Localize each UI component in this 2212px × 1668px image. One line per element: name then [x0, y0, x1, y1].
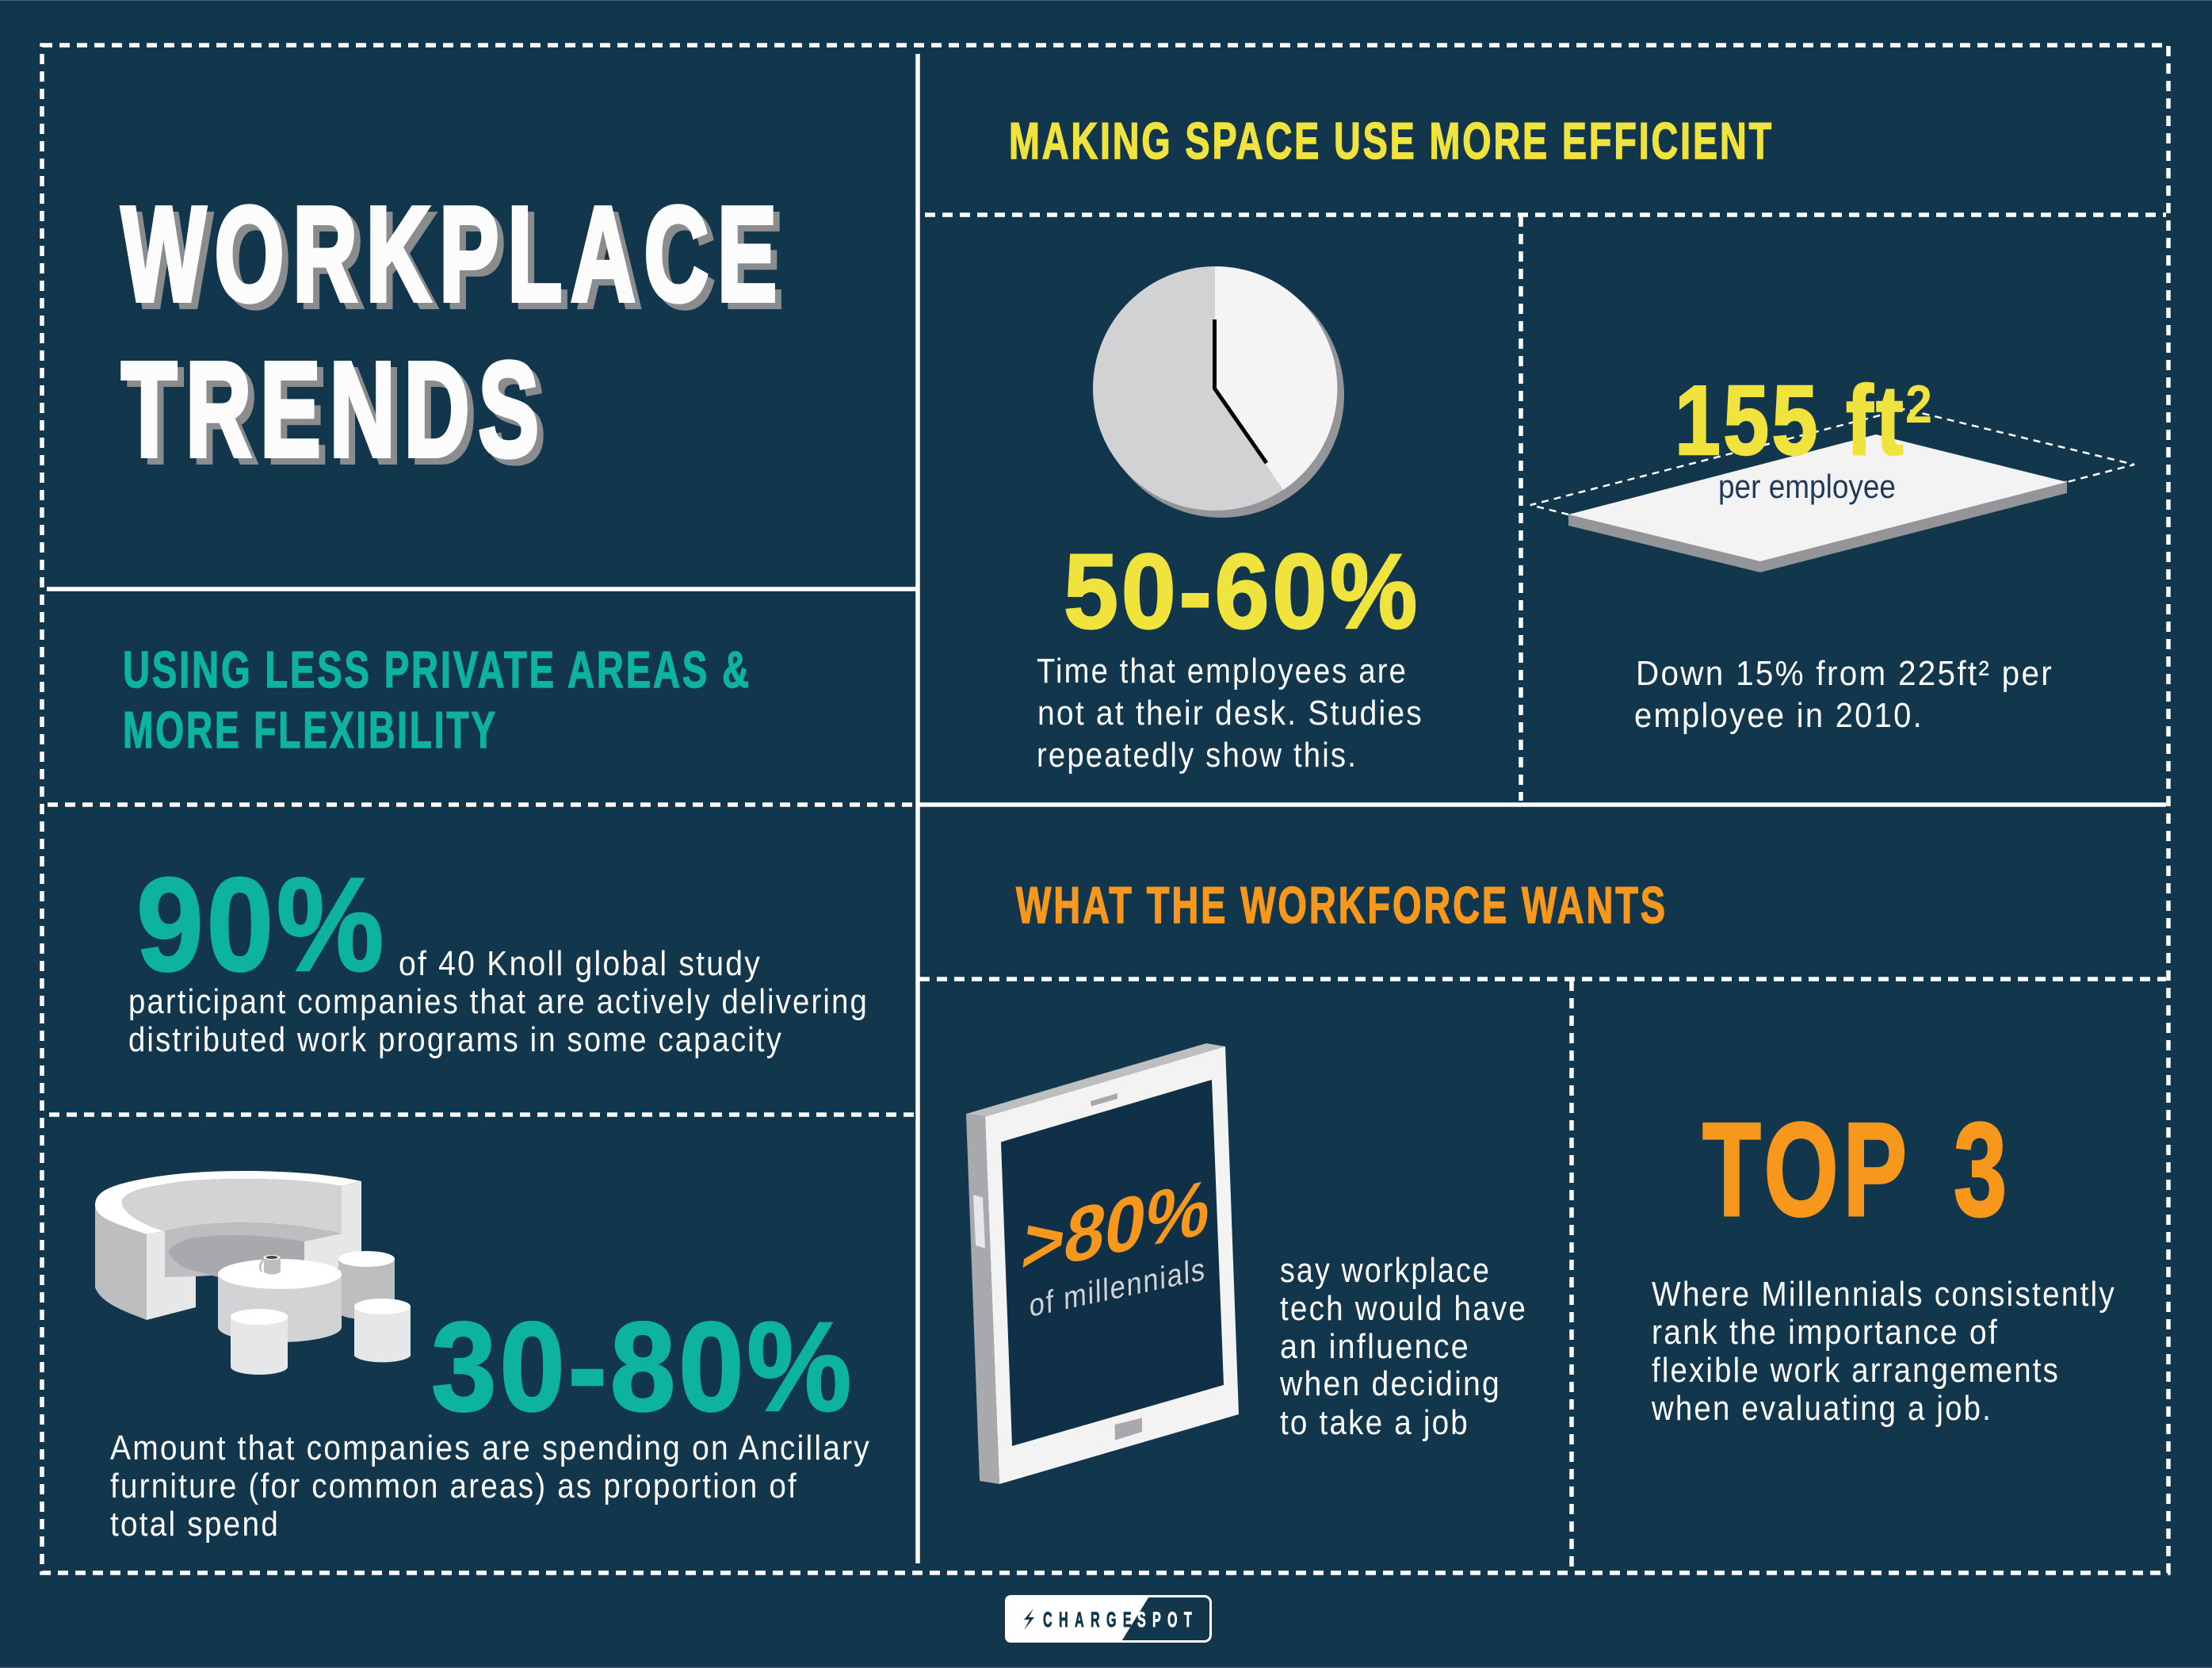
text: say workplace tech: when deciding: [1279, 1364, 1501, 1403]
heading: using less private areas: USING LESS PRIVATE AREAS &: [123, 641, 751, 698]
text: say workplace tech: say workplace: [1280, 1251, 1491, 1290]
title: WORKPLACE: [121, 179, 785, 330]
stat: 155 square feet: 2: [1905, 374, 1932, 434]
logo: chargespot: CHARGE: [1043, 1608, 1138, 1632]
heading: what the workforce wants: WHAT THE WORKFORCE WANTS: [1016, 876, 1668, 934]
icon: tablet: [966, 1043, 1239, 1484]
text: down 15 percent: Down 15% from 225ft² per: [1636, 654, 2053, 693]
stat: 50-60 percent: Time that employees are: [1037, 652, 1408, 691]
stat: 30-80 percent: [110, 1295, 871, 1544]
logo: chargespot: [1005, 1595, 1211, 1643]
stat: top 3: rank the importance of: [1652, 1313, 1999, 1352]
icon: floor area platform: [1530, 409, 2134, 572]
logo: chargespot: SPOT: [1137, 1608, 1198, 1632]
stat: 50-60 percent: [1037, 533, 1423, 775]
stat: top 3: Where Millennials consistently: [1652, 1275, 2116, 1314]
stat: 50-60 percent: repeatedly show this.: [1037, 736, 1358, 775]
stat: top 3: [1651, 1095, 2116, 1428]
stat: top 3: when evaluating a job.: [1651, 1389, 1992, 1428]
text: say workplace tech: to take a job: [1280, 1403, 1469, 1442]
title: TRENDS: [121, 335, 548, 485]
stat: 30-80 percent: Amount that companies are spending on Ancillary: [110, 1429, 871, 1467]
icon: lounge furniture: [95, 1171, 411, 1375]
stat: 155 square feet: 155 ft: [1675, 366, 1906, 476]
stat: top 3: flexible work arrangements: [1652, 1351, 2060, 1390]
stat: 30-80 percent: furniture (for common areas) as proportion of: [110, 1467, 798, 1505]
stat: 30-80 percent: total spend: [110, 1505, 280, 1544]
text: down 15 percent: employee in 2010.: [1634, 696, 1924, 735]
heading: making space use more efficient: MAKING SPACE USE MORE EFFICIENT: [1009, 112, 1774, 170]
text: say workplace tech: an influence: [1280, 1327, 1470, 1366]
stat: 50-60 percent: 50-60%: [1064, 533, 1420, 651]
text: say workplace tech: tech would have: [1280, 1289, 1527, 1328]
stat: 90 percent: of 40 Knoll global study: [399, 944, 762, 983]
stat: 30-80 percent: 30-80%: [431, 1295, 854, 1437]
text: say workplace tech: [1279, 1251, 1527, 1442]
stat: 90 percent: participant companies that are actively delivering: [128, 982, 869, 1021]
icon: tablet: of millennials: [1029, 1252, 1206, 1324]
stat: top 3: TOP 3: [1702, 1095, 2011, 1244]
text: down 15 percent: [1634, 654, 2053, 735]
stat: 90 percent: [128, 850, 869, 1059]
stat: 90 percent: 90%: [136, 850, 387, 999]
icon: clock pie: [1093, 266, 1344, 518]
heading: using less private areas: [123, 641, 751, 759]
label: per employee: per employee: [1718, 468, 1896, 505]
heading: using less private areas: MORE FLEXIBILITY: [123, 701, 498, 759]
title: [121, 179, 785, 485]
icon: tablet: >80%: [1017, 1163, 1216, 1291]
stat: 50-60 percent: not at their desk. Studies: [1037, 694, 1423, 733]
stat: 90 percent: distributed work programs in some capacity: [128, 1020, 783, 1059]
